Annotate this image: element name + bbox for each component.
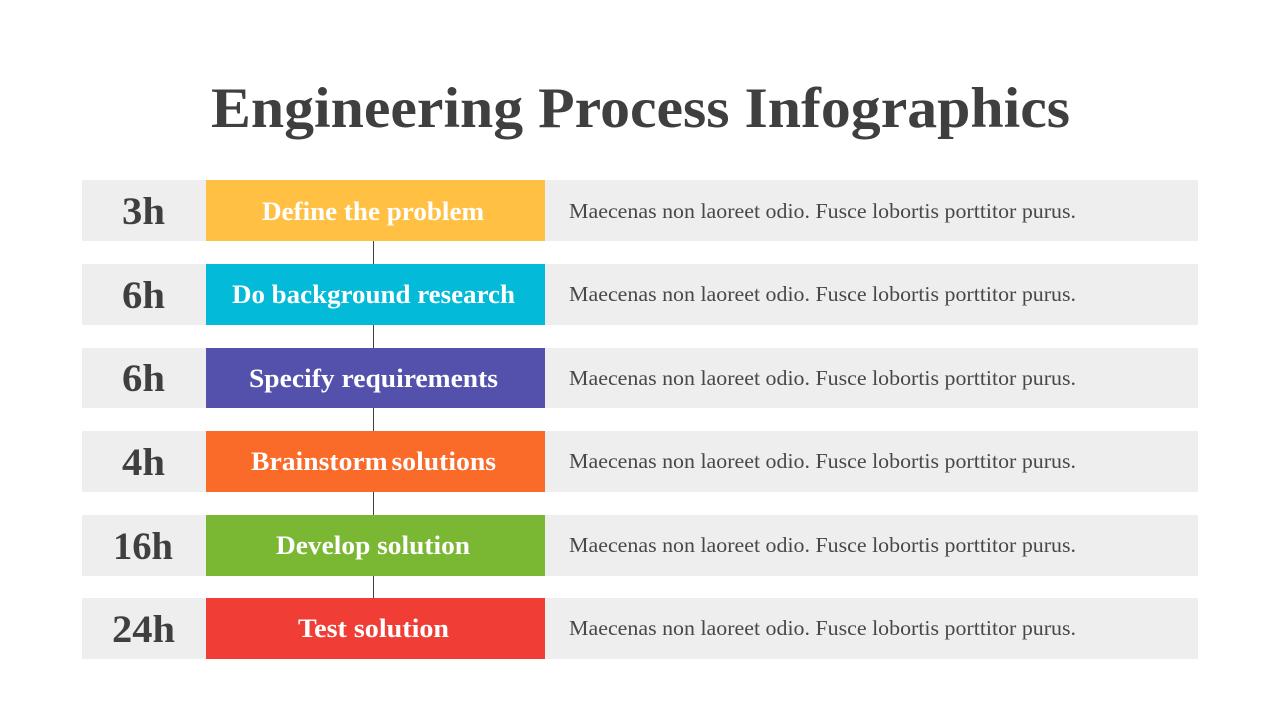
row 2: do background research — [82, 264, 1198, 325]
row 2: do background research: Maecenas non laoreet odio. Fusce lobortis porttitor purus. — [569, 282, 1076, 306]
row 4: brainstorm solutions: Brainstorm solutions — [251, 446, 496, 476]
title: Engineering Process Infographics — [211, 77, 1070, 140]
row 5: develop solution: Maecenas non laoreet odio. Fusce lobortis porttitor purus. — [569, 533, 1076, 557]
row 1: define the problem — [82, 180, 1198, 241]
row 4: brainstorm solutions — [82, 431, 1198, 492]
row 3: specify requirements — [82, 348, 1198, 408]
row 1: define the problem: Define the problem — [262, 196, 484, 226]
row 4: brainstorm solutions: Maecenas non laoreet odio. Fusce lobortis porttitor purus. — [569, 449, 1076, 473]
connector lines — [373, 241, 374, 598]
row 1: define the problem: 3h — [122, 190, 165, 233]
row 6: test solution: 24h — [112, 608, 175, 651]
row 6: test solution — [82, 598, 1198, 659]
row 1: define the problem: Maecenas non laoreet odio. Fusce lobortis porttitor purus. — [569, 199, 1076, 223]
row 3: specify requirements: 6h — [122, 357, 165, 400]
row 4: brainstorm solutions: 4h — [122, 441, 165, 484]
row 6: test solution: Test solution — [298, 613, 449, 643]
row 5: develop solution: 16h — [113, 525, 173, 568]
row 5: develop solution — [82, 515, 1198, 576]
row 3: specify requirements: Specify requirements — [249, 363, 498, 393]
row 3: specify requirements: Maecenas non laoreet odio. Fusce lobortis porttitor purus. — [569, 366, 1076, 390]
row 2: do background research: 6h — [122, 274, 165, 317]
row 5: develop solution: Develop solution — [276, 530, 470, 560]
row 2: do background research: Do background research — [232, 279, 515, 309]
row 6: test solution: Maecenas non laoreet odio. Fusce lobortis porttitor purus. — [569, 616, 1076, 640]
